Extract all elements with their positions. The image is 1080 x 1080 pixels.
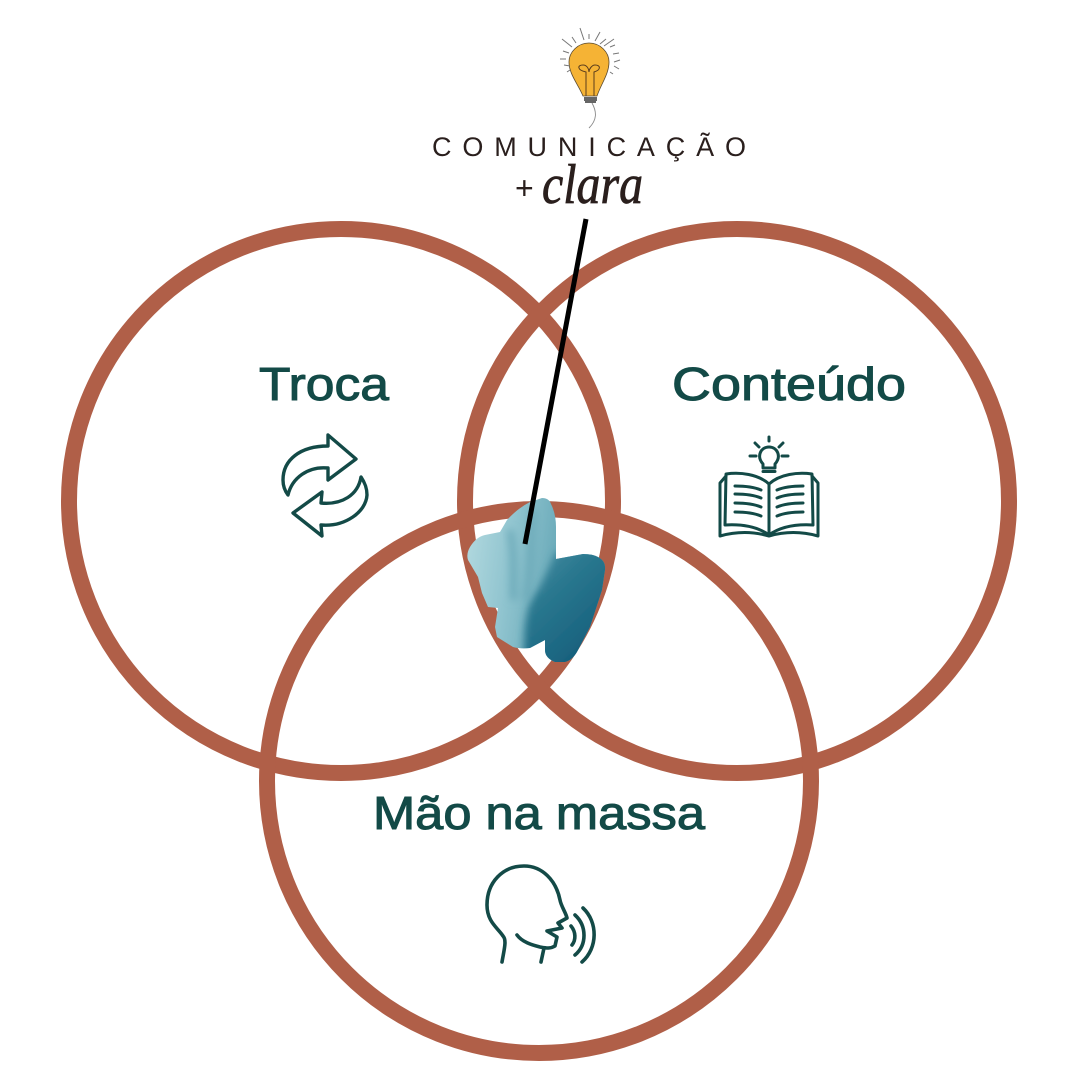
heading: Troca: Troca: [259, 358, 389, 410]
logo wordmark: COMUNICAÇÃO: [432, 131, 746, 162]
icon: light bulb: [560, 28, 620, 128]
circle: Mão na massa: [267, 509, 811, 1053]
pointer line from logo to centre: [525, 219, 586, 544]
heading: Mão na massa: Mão na massa: [373, 787, 705, 839]
watercolor blob at centre: [467, 498, 606, 662]
heading: Conteúdo: Conteúdo: [672, 358, 906, 410]
logo: Comunicação + clara: [432, 28, 746, 216]
icon: exchange arrows: [283, 435, 367, 536]
icon: open book with light bulb: [720, 437, 818, 536]
icon: speaking head: [487, 866, 594, 962]
circle: Conteúdo: [465, 229, 1009, 773]
logo script word: clara: [542, 154, 643, 216]
circle: Troca: [69, 229, 613, 773]
logo plus sign: +: [515, 170, 534, 206]
